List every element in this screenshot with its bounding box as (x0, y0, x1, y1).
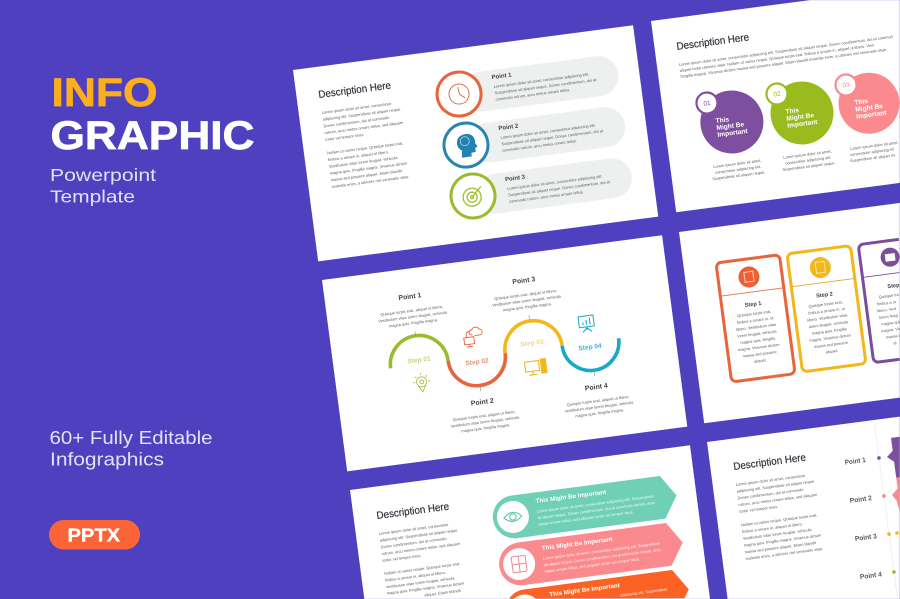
text block: Donec condimentum, dui at commodo (737, 487, 804, 500)
banner: teal (490, 474, 679, 541)
point 2 text: Quisque turpis erat, aliquet ut libero, (452, 409, 516, 422)
feature text: Infographics (50, 450, 164, 470)
text block (321, 100, 411, 189)
banner: teal: Lorem ipsum dolor sit amet, consectetur adipiscing elit. Suspendisse (536, 493, 654, 514)
card: step 2: aliquet. (825, 348, 838, 354)
wave chart (386, 304, 623, 403)
card: step 3: libero. Vest (877, 306, 898, 313)
card: step 3: al (893, 340, 897, 346)
text block: molestie enim, a ultricies nisl venenatis vitae. (331, 174, 410, 189)
point 4 text: Point 4 (585, 383, 608, 393)
banner: teal: sit aliquet neque. Donec condimentum, dui at commodo rutrum, arcu (537, 500, 655, 520)
step labels: Step 02 (465, 357, 489, 367)
card: step 1: Quisque turpis erat, (737, 309, 772, 318)
step labels: Step 04 (578, 343, 603, 353)
card: step 1: Step 1 (744, 301, 762, 309)
text block: Nullam ut varius neque. Quisque turpis erat, (741, 512, 818, 527)
point 3 text: Point 3 (512, 276, 536, 286)
icon: document (815, 261, 826, 273)
circle 03: Important (856, 110, 888, 121)
point 3 row: Lorem ipsum dolor sit amet, consectetur adipiscing elit. (507, 174, 603, 191)
text block: aliquet. Etiam blandit (424, 588, 462, 598)
circle 01: 01 (703, 100, 712, 108)
card: step 2: Quisque turpis erat, (808, 299, 843, 309)
icon: calendar (744, 271, 754, 282)
circle 02: consectetur adipiscing elit. (785, 155, 831, 166)
step labels: Step 01 (407, 355, 431, 366)
subtitle: Powerpoint (50, 165, 156, 185)
point labels: Point 1 (844, 457, 866, 467)
circle 03: This (854, 98, 869, 107)
text block: Lorem ipsum dolor sit amet, consectetur (379, 522, 449, 536)
banner: pink: This Might Be Important (542, 537, 613, 552)
point 2 text: Point 2 (471, 398, 494, 408)
text block: aliquet tortor ultricies vitae. Nullam ut varius neque. Quisque turpis erat, finibus a ornare in, aliquet ut libero. Vest (679, 42, 875, 73)
card: step 2 (787, 246, 866, 372)
text block: rutrum, arcu metus ornare tellus, sed aliquam (324, 120, 404, 135)
card: step 2: libero. Vestibulum vitae (807, 312, 849, 323)
card: step 1: magna. Vivamus dictum (738, 342, 781, 352)
card: step 3 (858, 239, 900, 363)
heading: Description Here (318, 81, 392, 101)
heading: Description Here (676, 32, 750, 53)
text block: adipiscing elit. Suspendisse sit aliquet neque. (322, 106, 402, 122)
banner: teal: metus ornare tellus, sed aliquam tortor vel tempor risus. (538, 509, 634, 527)
text block: Lorem ipsum dolor sit amet, consectetur (321, 101, 392, 115)
arrow tab: yellow (895, 531, 899, 535)
card: step 2: massa sed posuere (814, 340, 849, 349)
circle 02: Might Be (786, 112, 815, 123)
icon: desktop computer (524, 359, 547, 376)
circle 02 (765, 77, 841, 173)
heading: Description Here (733, 453, 807, 473)
text block: molestie enim, a ultricies nisl venenatis vitae. (745, 546, 824, 561)
text block (735, 472, 825, 561)
panel: slide with arrow banners (350, 445, 710, 599)
banner: orange: adipiscing elit. Suspendisse (620, 586, 668, 598)
banner: pink: Lorem ipsum dolor sit amet, consectetur adipiscing elit. Suspendisse (543, 541, 660, 561)
panel: slide with numbered circles (651, 0, 900, 212)
circle 01 (695, 86, 770, 182)
card: step 2: Step 2 (816, 291, 833, 300)
banner: orange: This Might Be Important (549, 583, 620, 598)
point 1 row: Suspendisse sit aliquet neque. Donec condimentum, dui at (494, 77, 597, 95)
text block: adipiscing elit. Suspendisse sit aliquet neque. (736, 478, 816, 494)
point 3 text: magna quis, fringilla magna. (503, 301, 552, 312)
text block: rutrum, arcu metus ornare tellus, sed aliquam (381, 541, 461, 556)
text block: Lorem ipsum dolor sit amet, consectetur (735, 473, 806, 487)
point 1 row: Lorem ipsum dolor sit amet, consectetur adipiscing elit. (494, 71, 589, 89)
card: step 1: finibus a ornare in, ut (737, 315, 775, 325)
title: GRAPHIC: GRAPHIC (50, 114, 254, 158)
point 2 row: commodo rutrum, arcu metus ornare tellus. (502, 138, 577, 153)
text block: magna quis, fringilla magna. Vivamus dictum (386, 580, 465, 596)
point 2 text (448, 395, 521, 435)
point 3 row (448, 153, 634, 221)
circle 02: This (785, 107, 800, 116)
icon: cloud and monitor (463, 326, 484, 347)
panel: slide with point list (707, 417, 900, 599)
point 1 text: Vestibulum vitae lorem feugiat, vehicula (378, 309, 448, 324)
icon: target (462, 186, 483, 207)
text block: Vestibulum vitae lorem feugiat, vehicula (743, 527, 813, 541)
card: step 2: magna quis, fringilla (812, 326, 848, 336)
text block: adipiscing elit. Suspendisse sit aliquet neque. (379, 527, 459, 543)
text block: Vestibulum vitae lorem feugiat, vehicula (386, 575, 456, 589)
point 3 row: Point 3 (505, 175, 526, 183)
point 3 row: Suspendisse sit aliquet neque. Donec condimentum, dui at (508, 179, 611, 197)
text block: tortor vel tempor risus. (325, 132, 365, 142)
card: step 1 (716, 255, 795, 382)
text block: magna quis, fringilla magna. Vivamus dictum (329, 160, 408, 176)
card: step 2: finibus a ornare in, ut (808, 306, 846, 316)
card: step 3: lorem feugi (879, 313, 899, 320)
circle 03: Lorem ipsum dolor sit amet, (850, 140, 899, 151)
point 1 row: Point 1 (491, 72, 513, 81)
text block: Donec condimentum, dui at commodo (380, 536, 448, 549)
point 1 text: magna quis, fringilla magna. (389, 317, 438, 328)
arrow tab: purple (887, 437, 900, 478)
card: step 3: Step (887, 283, 900, 290)
point 2 row: Lorem ipsum dolor sit amet, consectetur adipiscing elit. (500, 122, 596, 140)
circle 01: Might Be (716, 121, 745, 132)
point 1 text: Point 1 (398, 292, 422, 302)
text block (379, 521, 466, 598)
text block: rutrum, arcu metus ornare tellus, sed aliquam (738, 492, 818, 507)
card: step 3: Quisque tur (878, 292, 900, 299)
point labels: Point 2 (850, 495, 872, 505)
text block: tortor vel tempor risus. (739, 504, 779, 514)
text block: fringilla magna. Vivamus dictum massa sed posuere aliquet. Etiam blandit molestie enim, a ultricies nisl venenatis vitae. (680, 47, 887, 79)
panel: slide with step cards (679, 203, 900, 423)
icon: calculator (511, 555, 527, 573)
icon: briefcase (885, 253, 896, 262)
panel: slide with three points (293, 25, 658, 261)
circle 03: Suspendisse sit aliquet ne (850, 152, 896, 163)
card: step 2: lorem feugiat, vehicula (808, 319, 849, 329)
step labels: Step 03 (520, 339, 545, 349)
point 3 text (489, 273, 563, 314)
banner: pink (496, 521, 686, 588)
card: step 2: magna. Vivamus dictum (809, 332, 852, 343)
card: step 1: aliquet. (754, 357, 767, 364)
circle 03 (834, 68, 900, 164)
text block: finibus a ornare in, aliquet ut libero. (385, 570, 446, 583)
point 3 row: commodo rutrum, arcu metus ornare tellus. (509, 189, 584, 204)
badge: PPTX (49, 520, 140, 550)
banner: pink: sit aliquet neque. Donec condimentum, dui at commodo rutrum, arcu (543, 547, 661, 567)
banner: teal: This Might Be Important (535, 490, 607, 505)
circle 03: Might Be (855, 103, 884, 114)
point 3 text: Quisque turpis erat, aliquet ut libero, (494, 288, 557, 301)
point 3 text: Vestibulum vitae lorem feugiat, vehicula (492, 293, 562, 308)
point 2 row: Suspendisse sit aliquet neque. Donec condimentum, dui at (501, 128, 604, 146)
icon: presentation chart (578, 315, 595, 333)
arrow tab: pink (892, 477, 900, 512)
text block: Donec condimentum, dui at commodo (323, 115, 390, 128)
point labels: Point 4 (860, 571, 882, 581)
point 4 text: magna quis, fringilla magna. (575, 407, 624, 418)
text block: Nullam ut varius neque. Quisque turpis erat, (384, 561, 461, 576)
point labels (844, 457, 882, 581)
point 1 text: Quisque turpis erat, aliquet ut libero, (380, 304, 443, 317)
text block: Lorem ipsum dolor sit amet, consectetur adipiscing elit. Suspendisse sit aliquet neque. Donec condimentum, dui at commod (679, 34, 893, 67)
circle 02: Suspendisse sit aliquet neque. (782, 160, 836, 172)
card: step 1: libero. Vestibulum vitae (736, 322, 777, 332)
panel: slide with wave timeline (322, 235, 687, 471)
point 2 row: Point 2 (498, 124, 519, 132)
banner: pink: metus ornare tellus, sed aliquam tortor vel tempor risus. (544, 556, 640, 574)
circle 01: Important (717, 128, 749, 139)
circle 02: 02 (773, 91, 782, 99)
subtitle (50, 165, 156, 206)
card: step 1: lorem feugiat, vehicula (737, 328, 778, 339)
text block: tortor vel tempor risus. (382, 553, 422, 563)
circle 01: Lorem ipsum dolor sit amet, (713, 158, 762, 169)
point 1 row: commodo rutrum, arcu metus ornare tellus. (495, 87, 571, 102)
point 2 row (441, 102, 628, 170)
text block: finibus a ornare in, aliquet ut libero. (742, 521, 803, 534)
circle 02: Important (787, 119, 819, 130)
title: INFO: INFO (52, 71, 158, 115)
point labels: Point 3 (855, 533, 877, 543)
feature text: 60+ Fully Editable (50, 428, 212, 448)
icon: head with brain (456, 133, 479, 158)
point 4 text (562, 380, 635, 420)
text block: Nullam ut varius neque. Quisque turpis erat, (327, 140, 404, 155)
card: step 1: massa sed posuere (742, 349, 778, 359)
timeline dots (877, 456, 896, 574)
icon: eye (503, 511, 522, 523)
card: step 3: finibus a or (877, 299, 897, 307)
icon: clock (448, 83, 470, 105)
point 1 text (375, 289, 449, 330)
banner: orange (509, 570, 689, 599)
circle 03: consectetur adipiscing eli (850, 146, 894, 157)
text block: Vestibulum vitae lorem feugiat, vehicula (329, 155, 399, 169)
point 2 text: Vestibulum vitae lorem feugiat, vehicula (450, 415, 520, 429)
badge: PPTX: PPTX (68, 526, 120, 546)
circle 03: 03 (842, 82, 851, 90)
circle 01: Suspendisse sit aliquet neque. (712, 169, 766, 181)
point 2 text: magna quis, fringilla magna. (461, 422, 510, 433)
icon: light bulb (412, 372, 431, 393)
step labels (407, 331, 603, 375)
heading: Description Here (376, 502, 450, 522)
point 1 row (434, 51, 621, 119)
text block: finibus a ornare in, aliquet ut libero. (328, 149, 389, 162)
circle 01: This (715, 116, 730, 125)
subtitle: Template (50, 186, 135, 206)
feature text (50, 428, 212, 470)
circle 02: Lorem ipsum dolor sit amet, (783, 149, 832, 160)
point 4 text: Vestibulum vitae lorem feugiat, vehicula (564, 400, 634, 414)
circle 01: consectetur adipiscing elit. (715, 164, 761, 175)
card: step 1: magna quis, fringilla (740, 335, 776, 345)
text block: massa sed posuere aliquet. Etiam blandit (330, 168, 403, 182)
text block: massa sed posuere aliquet. Etiam blandit (744, 540, 817, 554)
point 4 text: Quisque turpis erat, aliquet ut libero, (566, 394, 630, 407)
text block: magna quis, fringilla magna. Vivamus dictum (743, 532, 822, 548)
